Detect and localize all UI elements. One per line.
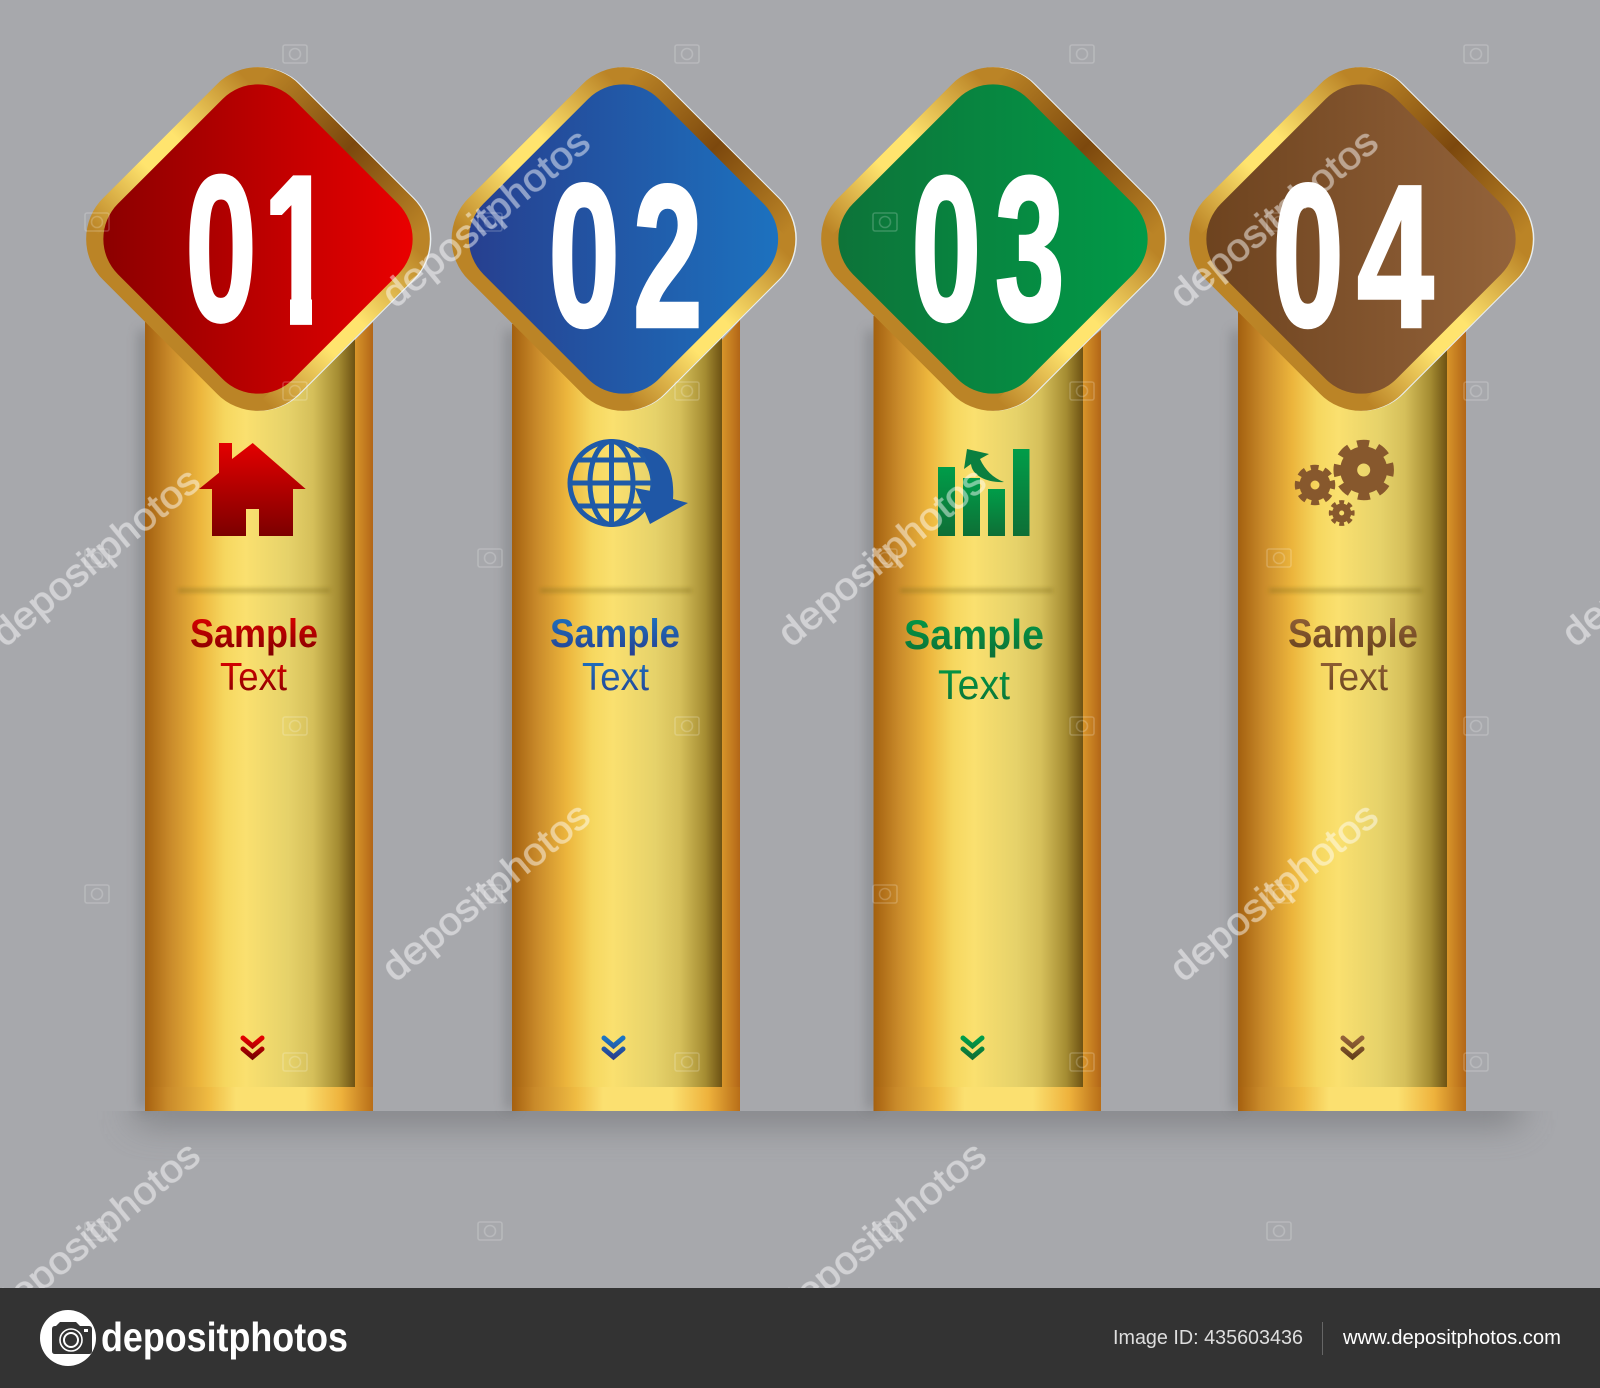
panel: column 04 <box>1232 312 1466 1111</box>
watermark: depositphotos text: depositphotos <box>374 121 598 316</box>
number 04: 0 <box>1272 141 1344 369</box>
divider <box>540 589 692 592</box>
panel: column 02 <box>506 320 740 1111</box>
text: Text: Text <box>220 656 287 699</box>
icon: double chevron <box>1343 1038 1362 1057</box>
footer bar <box>0 1288 1600 1388</box>
badge: 03 <box>797 43 1190 435</box>
number 01: 0 <box>185 134 257 365</box>
icon: globe with arrow <box>570 441 688 525</box>
logo text: depositphotos <box>101 1314 348 1360</box>
icon: house <box>199 443 306 536</box>
number 03 <box>912 134 1065 363</box>
text: Text: Text <box>1320 656 1388 699</box>
number 03: 0 <box>912 134 981 363</box>
icon: camera logo <box>40 1310 96 1366</box>
icon: double chevron <box>963 1038 982 1057</box>
number 04 <box>1272 141 1434 370</box>
watermark: depositphotos text: depositphotos <box>374 795 598 990</box>
heading: Sample: Sample <box>904 611 1044 658</box>
badge: 01 <box>86 67 432 411</box>
panel: column 03 <box>867 316 1101 1111</box>
divider <box>178 589 330 592</box>
website url: www.depositphotos.com <box>1342 1327 1561 1349</box>
heading: Sample: Sample <box>550 612 680 656</box>
badge: 02 <box>428 43 821 435</box>
watermark: depositphotos text: depositphotos <box>1162 795 1386 990</box>
number 02: 2 <box>633 142 703 370</box>
badge: 04 <box>1165 43 1558 435</box>
number 01: 1 <box>263 132 334 369</box>
floor shadow <box>135 1092 1520 1122</box>
watermark: depositphotos text: depositphotos <box>770 460 994 655</box>
icon: gears <box>1298 444 1389 524</box>
number 03: 3 <box>995 134 1065 363</box>
text: Text: Text <box>582 656 649 699</box>
watermark: depositphotos text: depositphotos <box>770 1134 994 1329</box>
image id: Image ID: 435603436 <box>1113 1327 1303 1349</box>
number 02 <box>548 141 703 370</box>
panel: column 01 <box>139 322 373 1111</box>
divider <box>1269 589 1422 592</box>
icon: bar chart with arrow <box>938 449 1030 536</box>
icon: double chevron <box>604 1038 623 1057</box>
divider <box>900 589 1053 592</box>
icon: double chevron <box>243 1038 262 1057</box>
heading: Sample: Sample <box>190 612 318 656</box>
number 01 <box>189 174 312 325</box>
number 04: 4 <box>1357 143 1434 370</box>
watermark: camera icons <box>85 45 1488 1240</box>
text: Text: Text <box>938 661 1010 708</box>
heading: Sample: Sample <box>1288 612 1418 656</box>
number 02: 0 <box>548 141 620 369</box>
watermark: depositphotos text: depositphotos <box>1162 121 1386 316</box>
